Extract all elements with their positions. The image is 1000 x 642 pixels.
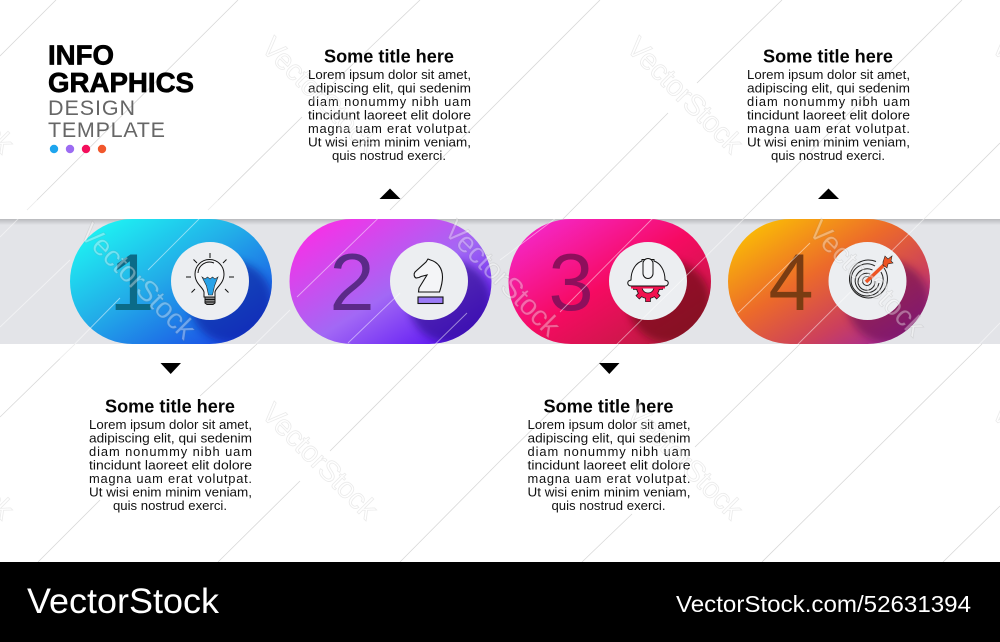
icon: chess knight	[414, 259, 443, 304]
text block: step 4: Some title here	[763, 46, 893, 66]
number 2: 2	[329, 238, 375, 328]
text block: step 3: Lorem ipsum dolor sit amet,	[528, 417, 690, 432]
text: VectorStock	[255, 397, 384, 526]
text block: step 2	[308, 46, 471, 163]
text block: step 4: quis nostrud exerci.	[771, 148, 885, 163]
step 2 pill	[290, 219, 492, 344]
text: VectorStock	[73, 217, 202, 346]
text block: step 1: diam nonummy nibh uam	[89, 444, 252, 459]
text block: step 3: Some title here	[544, 396, 674, 416]
icon: light bulb	[186, 253, 234, 304]
text block: step 3: adipiscing elit, qui sedenim	[528, 430, 690, 446]
icon circle 4	[828, 242, 906, 320]
text block: step 1: tincidunt laoreet elit dolore	[89, 458, 252, 472]
text block: step 2: Lorem ipsum dolor sit amet,	[308, 67, 471, 82]
text block: step 4: adipiscing elit, qui sedenim	[747, 80, 910, 96]
grey horizontal band	[0, 219, 1000, 344]
text block: step 4: Lorem ipsum dolor sit amet,	[747, 67, 910, 82]
text: VectorStock	[620, 31, 749, 160]
text: VectorStock	[620, 397, 749, 526]
step 1 pill	[70, 219, 272, 344]
number 4: 4	[768, 238, 814, 328]
text block: step 1: Ut wisi enim minim veniam,	[89, 484, 252, 500]
title block	[48, 40, 194, 153]
title block: TEMPLATE	[48, 118, 165, 142]
text: VectorStock	[802, 214, 931, 343]
footer image id: VectorStock.com/52631394	[676, 591, 971, 617]
text block: step 3	[528, 396, 690, 513]
text block: step 1: adipiscing elit, qui sedenim	[89, 430, 252, 446]
step 4 pill	[728, 219, 930, 344]
text block: step 4: tincidunt laoreet elit dolore	[747, 108, 910, 122]
text block: step 3: Ut wisi enim minim veniam,	[528, 484, 690, 500]
title block: INFO	[48, 40, 114, 70]
text block: step 1: quis nostrud exerci.	[113, 498, 227, 513]
text block: step 4: magna uam erat volutpat.	[747, 121, 910, 136]
text block: step 3: tincidunt laoreet elit dolore	[528, 458, 690, 472]
text block: step 1	[89, 396, 252, 513]
title block: GRAPHICS	[48, 67, 194, 98]
footer bar	[0, 562, 1000, 642]
arrow: step 2 up	[380, 188, 400, 199]
icon circle 1	[171, 242, 249, 320]
text block: step 2: adipiscing elit, qui sedenim	[308, 80, 471, 96]
arrow: step 3 down	[599, 363, 620, 374]
text block: step 2: magna uam erat volutpat.	[308, 121, 471, 136]
text block: step 2: tincidunt laoreet elit dolore	[308, 108, 471, 122]
text block: step 4: Ut wisi enim minim veniam,	[747, 134, 910, 150]
text block: step 3: quis nostrud exerci.	[552, 498, 666, 513]
text: VectorStock	[438, 214, 567, 343]
step 3 pill	[508, 219, 711, 344]
icon circle 3	[609, 242, 687, 320]
icon: target with arrow	[849, 256, 893, 298]
number 3: 3	[548, 238, 594, 328]
arrow: step 4 up	[818, 188, 839, 199]
number 1: 1	[109, 238, 155, 328]
footer brand: VectorStock	[27, 582, 220, 621]
arrow: step 1 down	[160, 363, 181, 374]
title block: DESIGN	[48, 96, 135, 120]
text block: step 4: diam nonummy nibh uam	[747, 94, 910, 109]
text block: step 2: Some title here	[324, 46, 454, 66]
text block: step 2: Ut wisi enim minim veniam,	[308, 134, 471, 150]
text block: step 3: magna uam erat volutpat.	[528, 471, 690, 486]
text block: step 1: Lorem ipsum dolor sit amet,	[89, 417, 252, 432]
icon: helmet with gear	[628, 258, 668, 302]
legend dots	[50, 145, 106, 153]
text block: step 4	[747, 46, 910, 163]
icon circle 2	[390, 242, 468, 320]
text block: step 3: diam nonummy nibh uam	[528, 444, 690, 459]
text block: step 1: Some title here	[105, 396, 235, 416]
text block: step 2: quis nostrud exerci.	[332, 148, 446, 163]
text block: step 2: diam nonummy nibh uam	[308, 94, 471, 109]
text block: step 1: magna uam erat volutpat.	[89, 471, 252, 486]
text: VectorStock	[255, 31, 384, 160]
